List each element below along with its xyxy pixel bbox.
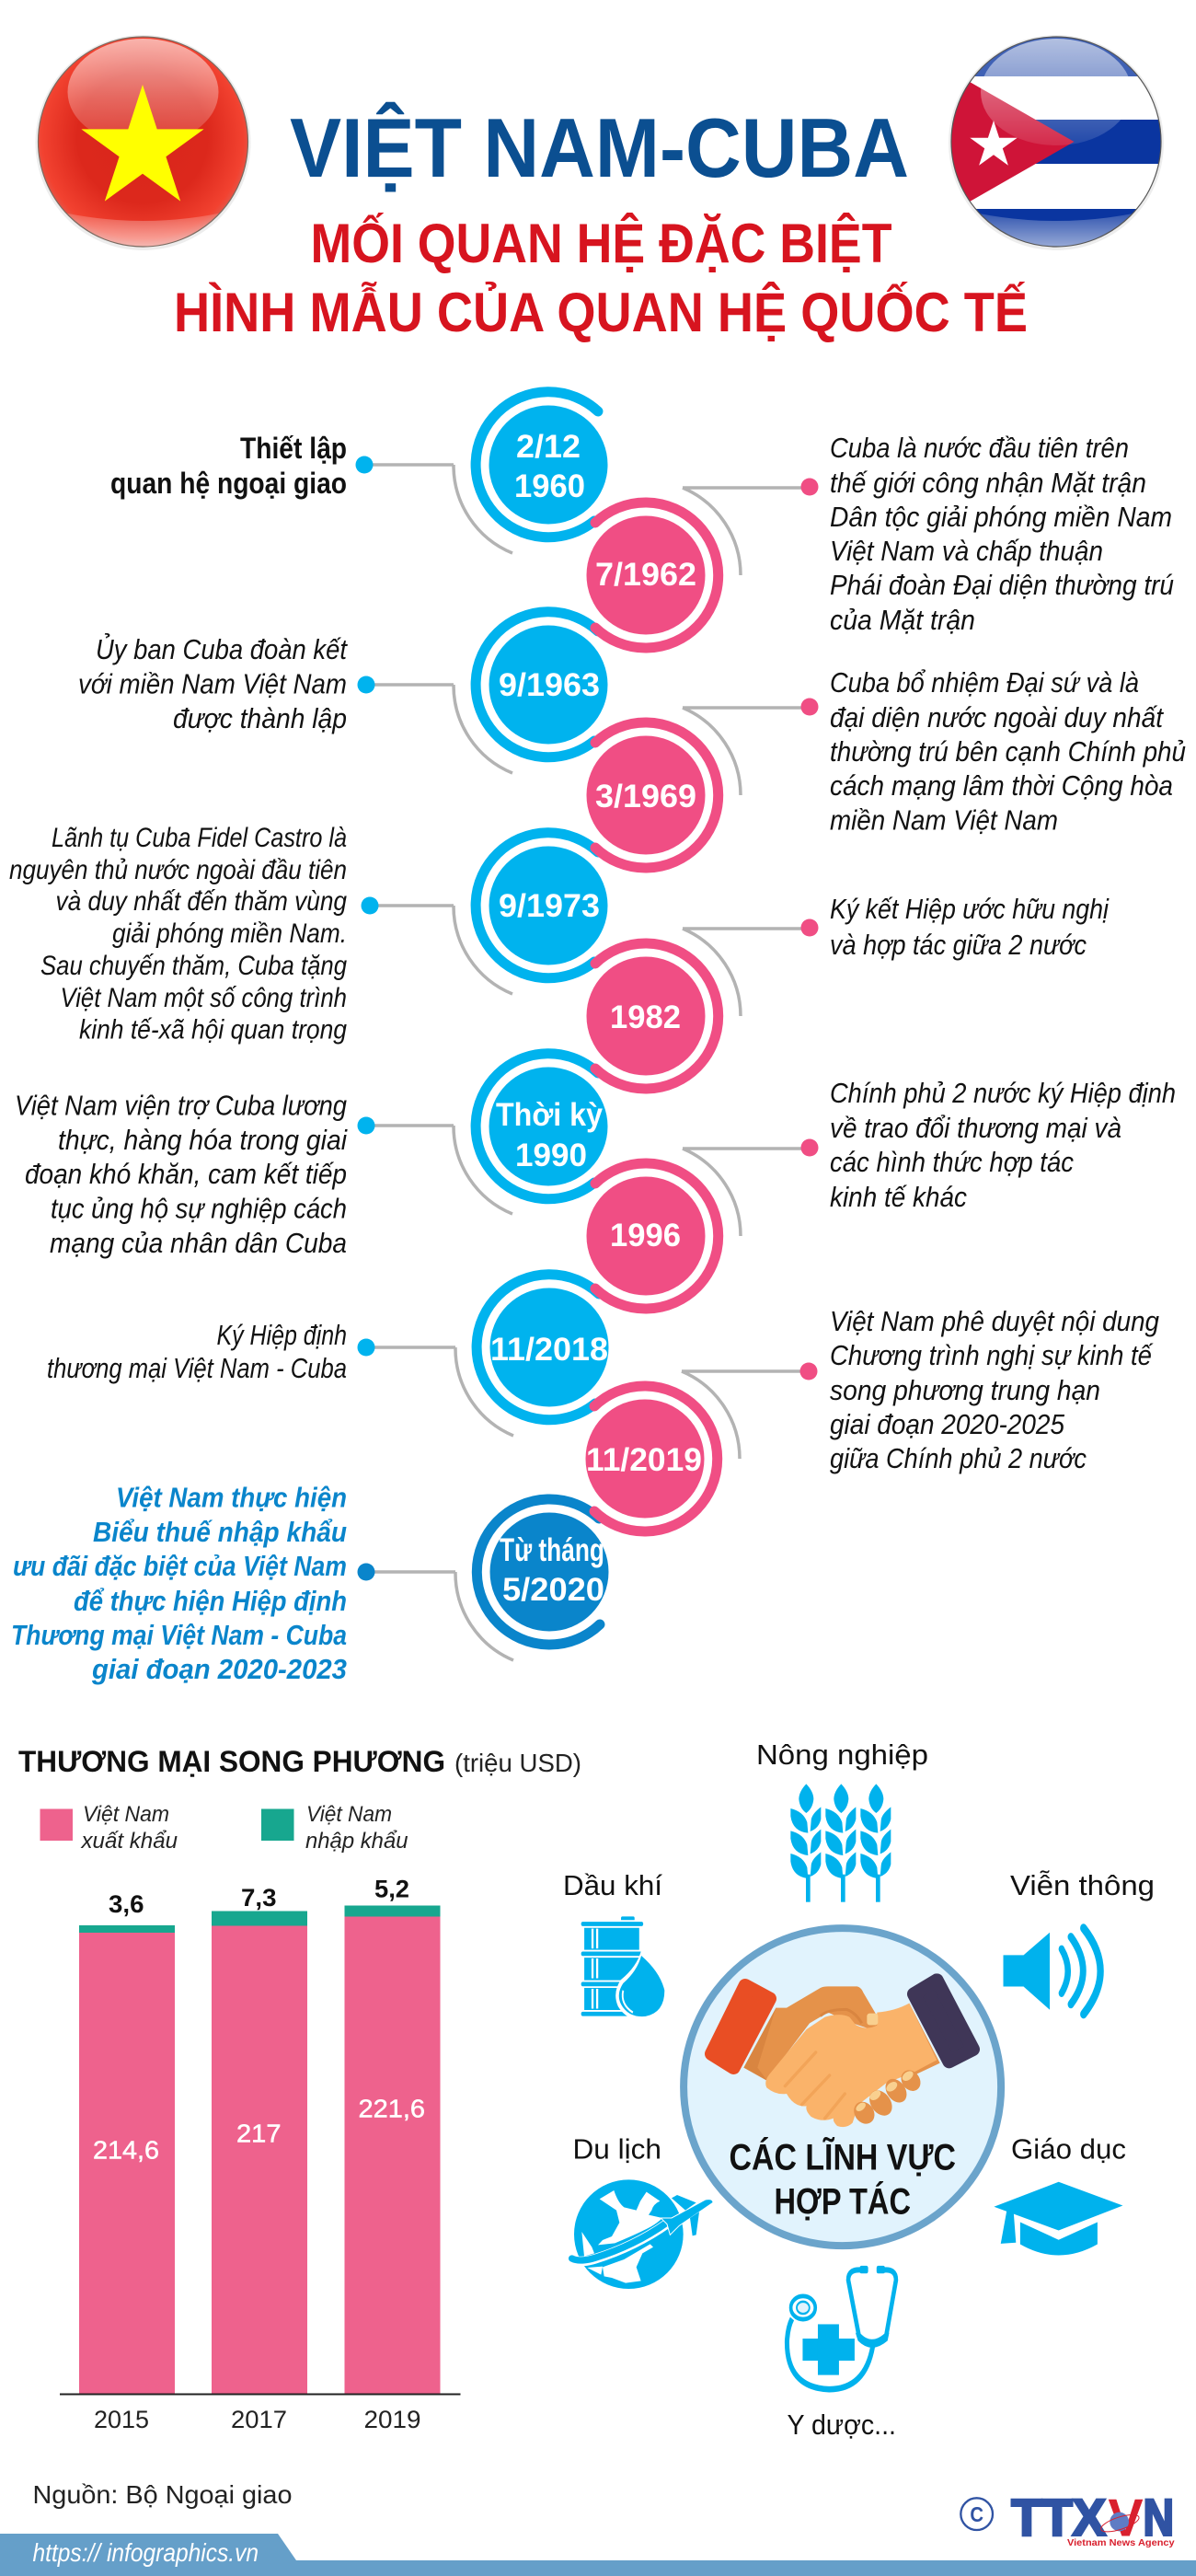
text block: Việt Nam viện trợ Cuba: mạng của nhân dân Cuba: [50, 1227, 347, 1259]
stacked bar chart: 5,2: [374, 1876, 409, 1903]
text block: Fidel Castro: Sau chuyến thăm, Cuba tặng: [40, 951, 347, 981]
title: VIỆT NAM-CUBA: [290, 101, 909, 195]
chart legend: xuất khẩu: [80, 1829, 178, 1854]
text block: Chương trình nghị sự: giai đoạn 2020-2025: [830, 1408, 1065, 1440]
label: Giáo dục: Giáo dục: [1011, 2133, 1126, 2165]
text block: Thiết lập quan hệ ngoại giao: quan hệ ngoại giao: [110, 467, 347, 500]
icon: wheat: [790, 1784, 891, 1902]
stacked bar chart: 7,3: [241, 1884, 276, 1912]
logo: TTXVN: N: [1144, 2488, 1174, 2546]
stacked bar chart: 2015: [94, 2406, 149, 2433]
text block: Thiết lập quan hệ ngoại giao: [110, 432, 347, 500]
chart legend: Việt Nam: [83, 1802, 169, 1827]
text block: Ký Hiệp định thương mại: Ký Hiệp định: [217, 1319, 347, 1351]
text block: Biểu thuế nhập khẩu highlight: ưu đãi đặc biệt của Việt Nam: [13, 1550, 347, 1582]
stacked bar chart: 3,6: [109, 1890, 144, 1918]
text block: Fidel Castro: [9, 823, 347, 1045]
stacked bar chart: 217: [236, 2119, 282, 2148]
stacked bar chart: [60, 1876, 460, 2433]
footer band: https:// infographics.vn: [33, 2538, 259, 2567]
stacked bar chart: 214,6: [93, 2135, 159, 2165]
chart legend: [40, 1802, 408, 1854]
timeline date labels: 2/12: [516, 429, 581, 465]
icon: speaker: [1004, 1928, 1100, 2015]
icon: graduation cap: [994, 2182, 1122, 2256]
text block: Việt Nam viện trợ Cuba: đoạn khó khăn, cam kết tiếp: [25, 1158, 347, 1190]
text block: Fidel Castro: Việt Nam một số công trình: [61, 983, 347, 1013]
timeline date labels: 7/1962: [595, 557, 696, 593]
text block: Ký Hiệp định thương mại: thương mại Việt Nam - Cuba: [47, 1352, 347, 1384]
timeline date labels: 1996: [610, 1218, 681, 1253]
heading: trade chart: (triệu USD): [454, 1749, 581, 1777]
icon: handshake: [711, 1981, 973, 2128]
text block: Việt Nam viện trợ Cuba: [15, 1090, 348, 1259]
timeline date labels: 9/1963: [499, 667, 600, 703]
chart legend: nhập khẩu: [305, 1829, 408, 1854]
text block: Cuba bổ nhiệm Đại sứ: Cuba bổ nhiệm Đại sứ và là: [830, 666, 1139, 699]
text block: Biểu thuế nhập khẩu highlight: giai đoạn 2020-2023: [91, 1653, 347, 1685]
timeline dots: [355, 456, 819, 1581]
text block: Ký kết Hiệp ước: Ký kết Hiệp ước hữu nghị: [830, 893, 1110, 925]
logo: TTXVN: C: [970, 2502, 983, 2526]
label: Viễn thông: Viễn thông: [1010, 1869, 1155, 1901]
text block: Ủy ban Cuba đoàn kết: với miền Nam Việt Nam: [78, 668, 347, 699]
chart legend: Việt Nam: [306, 1802, 392, 1827]
text block: Ký Hiệp định thương mại: [47, 1319, 347, 1384]
text block: Biểu thuế nhập khẩu highlight: [11, 1482, 347, 1685]
text block: Fidel Castro: Lãnh tụ Cuba Fidel Castro là: [52, 823, 347, 853]
icon: oil barrel and drop: [581, 1916, 667, 2020]
timeline date labels: 11/2018: [490, 1332, 608, 1368]
timeline date labels: 5/2020: [502, 1572, 604, 1608]
text block: Ủy ban Cuba đoàn kết: [78, 632, 348, 734]
text block: Chính phủ 2 nước ký Hiệp định: [830, 1077, 1176, 1213]
stacked bar chart: 221,6: [359, 2095, 425, 2122]
text block: Cuba công nhận Mặt trận: thế giới công nhận Mặt trận: [830, 467, 1146, 499]
text block: Ký kết Hiệp ước: và hợp tác giữa 2 nước: [830, 929, 1087, 961]
text block: Cuba công nhận Mặt trận: của Mặt trận: [830, 604, 975, 636]
panel: cooperation center circle: CÁC LĨNH VỰC: [729, 2135, 956, 2177]
timeline blue circles: [476, 392, 609, 1645]
logo: TTXVN: Vietnam News Agency: [1067, 2538, 1175, 2548]
timeline date labels: Thời kỳ: [496, 1097, 603, 1133]
text block: Chương trình nghị sự: song phương trung hạn: [830, 1374, 1100, 1406]
text block: Biểu thuế nhập khẩu highlight: Thương mại Việt Nam - Cuba: [11, 1619, 347, 1651]
title: MỐI QUAN HỆ ĐẶC BIỆT: [311, 213, 892, 274]
text block: Việt Nam viện trợ Cuba: Việt Nam viện trợ Cuba lương: [15, 1090, 347, 1121]
logo: TTXVN: V: [1108, 2489, 1144, 2548]
label: Dầu khí: Dầu khí: [563, 1869, 662, 1901]
text block: Cuba công nhận Mặt trận: Việt Nam và chấp thuận: [830, 535, 1103, 567]
text block: Biểu thuế nhập khẩu highlight: để thực hiện Hiệp định: [74, 1585, 347, 1617]
heading: trade chart: THƯƠNG MẠI SONG PHƯƠNG: [18, 1745, 445, 1778]
text block: Fidel Castro: và duy nhất đến thăm vùng: [55, 886, 347, 917]
footer band: [0, 2534, 1196, 2576]
timeline date labels: 3/1969: [595, 779, 696, 814]
source note: Nguồn: Bộ Ngoại giao: [33, 2480, 293, 2509]
text block: Fidel Castro: kinh tế-xã hội quan trọng: [79, 1014, 347, 1045]
logo: TTXVN: TTX: [1011, 2488, 1106, 2546]
text block: Việt Nam viện trợ Cuba: tục ủng hộ sự nghiệp cách: [51, 1193, 347, 1224]
text block: Chương trình nghị sự: Việt Nam phê duyệt nội dung: [830, 1305, 1159, 1337]
timeline pink circles: [585, 502, 719, 1531]
timeline date labels: 9/1973: [499, 888, 600, 924]
stacked bar chart: 2017: [231, 2406, 287, 2433]
title: [174, 101, 1028, 343]
icon: Cuba flag: [949, 35, 1164, 250]
text block: Cuba bổ nhiệm Đại sứ: [830, 666, 1186, 836]
text block: Việt Nam viện trợ Cuba: thực, hàng hóa trong giai: [58, 1124, 348, 1156]
text block: Fidel Castro: nguyên thủ nước ngoài đầu tiên: [9, 855, 347, 885]
text block: Cuba công nhận Mặt trận: Dân tộc giải phóng miền Nam: [830, 501, 1172, 533]
text block: Biểu thuế nhập khẩu highlight: Biểu thuế nhập khẩu: [93, 1516, 347, 1548]
timeline connectors: [373, 465, 810, 1660]
timeline date labels: Từ tháng: [500, 1532, 604, 1568]
text block: Chính phủ 2 nước ký Hiệp định: về trao đổi thương mại và: [830, 1112, 1121, 1144]
timeline date labels: 1982: [610, 999, 681, 1035]
label: Nông nghiệp: Nông nghiệp: [756, 1739, 928, 1771]
label: Y dược: Y dược...: [788, 2409, 896, 2441]
text block: Biểu thuế nhập khẩu highlight: Việt Nam thực hiện: [116, 1482, 347, 1513]
text block: Ký kết Hiệp ước: [830, 893, 1110, 961]
text block: Thiết lập quan hệ ngoại giao: Thiết lập: [240, 432, 347, 465]
logo: TTXVN: [960, 2488, 1175, 2548]
text block: Ủy ban Cuba đoàn kết: được thành lập: [173, 702, 347, 734]
timeline date labels: [490, 429, 702, 1608]
text block: Chính phủ 2 nước ký Hiệp định: các hình thức hợp tác: [830, 1146, 1074, 1178]
title: HÌNH MẪU CỦA QUAN HỆ QUỐC TẾ: [174, 282, 1028, 343]
panel: cooperation center circle: [684, 1928, 1001, 2246]
text block: Ủy ban Cuba đoàn kết: Ủy ban Cuba đoàn kết: [96, 632, 348, 665]
text block: Chính phủ 2 nước ký Hiệp định: kinh tế khác: [830, 1181, 967, 1213]
panel: cooperation center circle: HỢP TÁC: [775, 2181, 911, 2222]
text block: Chương trình nghị sự: giữa Chính phủ 2 nước: [830, 1442, 1087, 1474]
icon: globe and plane: [572, 2179, 713, 2289]
text block: Cuba công nhận Mặt trận: [830, 432, 1174, 636]
text block: Chương trình nghị sự: Chương trình nghị sự kinh tế: [830, 1339, 1154, 1371]
icon: Vietnam flag: [35, 35, 250, 250]
text block: Cuba bổ nhiệm Đại sứ: đại diện nước ngoài duy nhất: [830, 701, 1164, 734]
text block: Cuba công nhận Mặt trận: Cuba là nước đầu tiên trên: [830, 432, 1129, 464]
timeline date labels: 1990: [515, 1138, 587, 1173]
stacked bar chart: 2019: [364, 2406, 421, 2433]
text block: Chương trình nghị sự: [830, 1305, 1159, 1474]
text block: Cuba bổ nhiệm Đại sứ: miền Nam Việt Nam: [830, 804, 1058, 836]
timeline date labels: 11/2019: [586, 1442, 702, 1478]
icon: stethoscope and medical cross: [787, 2266, 896, 2389]
label: Du lịch: Du lịch: [572, 2133, 661, 2165]
timeline date labels: 1960: [514, 468, 585, 504]
text block: Fidel Castro: giải phóng miền Nam.: [112, 918, 347, 949]
